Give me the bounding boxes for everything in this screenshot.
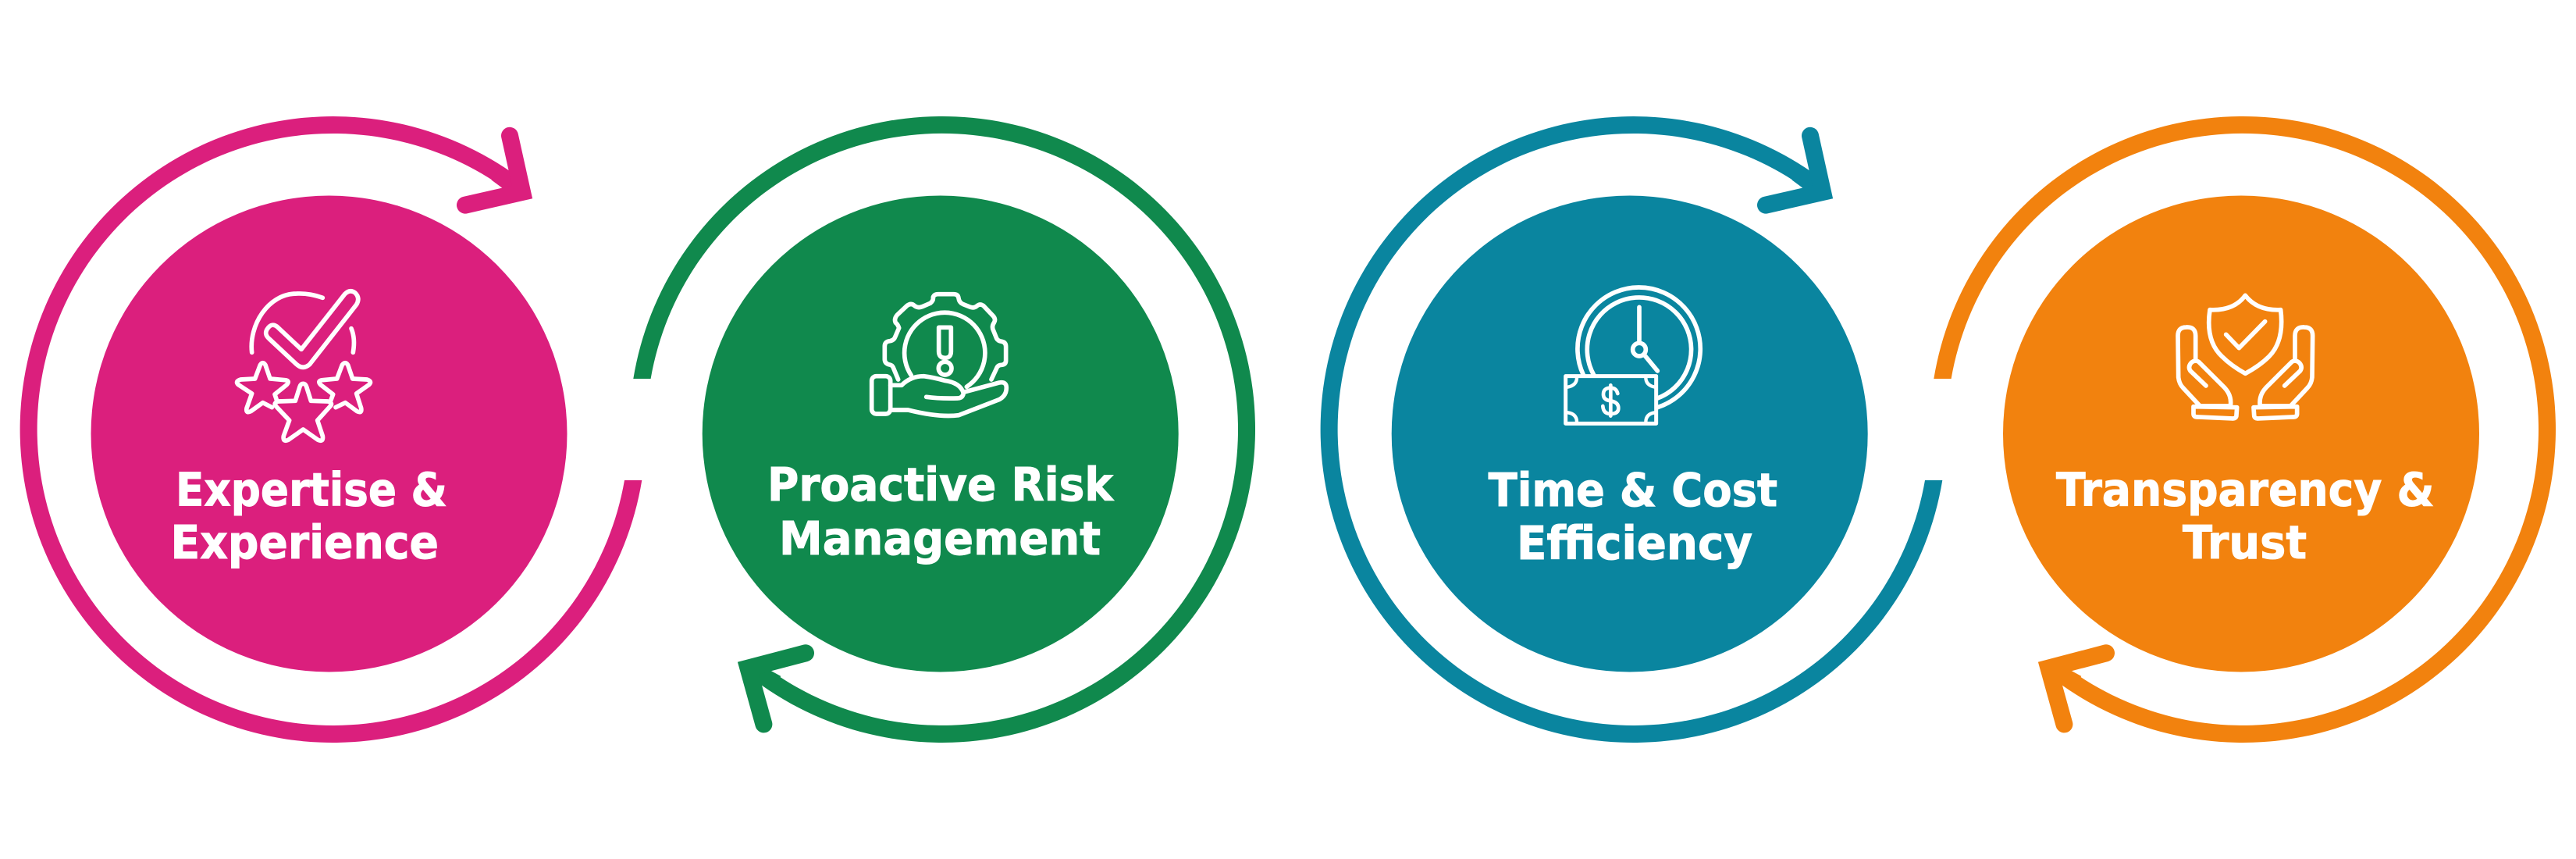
heading: Proactive Risk Management [767,458,1115,565]
ring with arrow: green [633,116,1255,743]
heading: Expertise & Experience: Experience [170,516,439,569]
icon: shield protected by two hands [2178,295,2313,419]
heading: Transparency & Trust: Transparency & [2056,464,2435,517]
heading: Proactive Risk Management: Proactive Risk [767,458,1115,511]
heading: Time & Cost Efficiency: Efficiency [1517,517,1752,570]
disc: green [703,195,1179,672]
disc: pink [91,195,567,672]
ring with arrow: orange [1934,116,2556,743]
icon: clock and banknote [1566,287,1700,423]
ring with arrow: pink [20,116,642,743]
heading: Time & Cost Efficiency: Time & Cost [1489,464,1777,517]
disc: orange [2003,195,2479,672]
panel: Transparency & Trust [1934,116,2556,743]
panel: Expertise & Experience [20,116,642,743]
icon: gear with warning held in a hand [872,294,1006,415]
heading: Expertise & Experience [170,464,447,569]
heading: Transparency & Trust [2056,464,2435,569]
ring with arrow: teal [1321,116,1942,743]
heading: Time & Cost Efficiency [1489,464,1777,570]
heading: Expertise & Experience: Expertise & [176,464,447,517]
icon: check mark and three stars [237,291,370,440]
heading: Transparency & Trust: Trust [2183,516,2307,569]
heading: Proactive Risk Management: Management [779,512,1101,565]
disc: teal [1392,195,1868,672]
panel: Proactive Risk Management [633,116,1255,743]
panel: Time & Cost Efficiency [1321,116,1942,743]
